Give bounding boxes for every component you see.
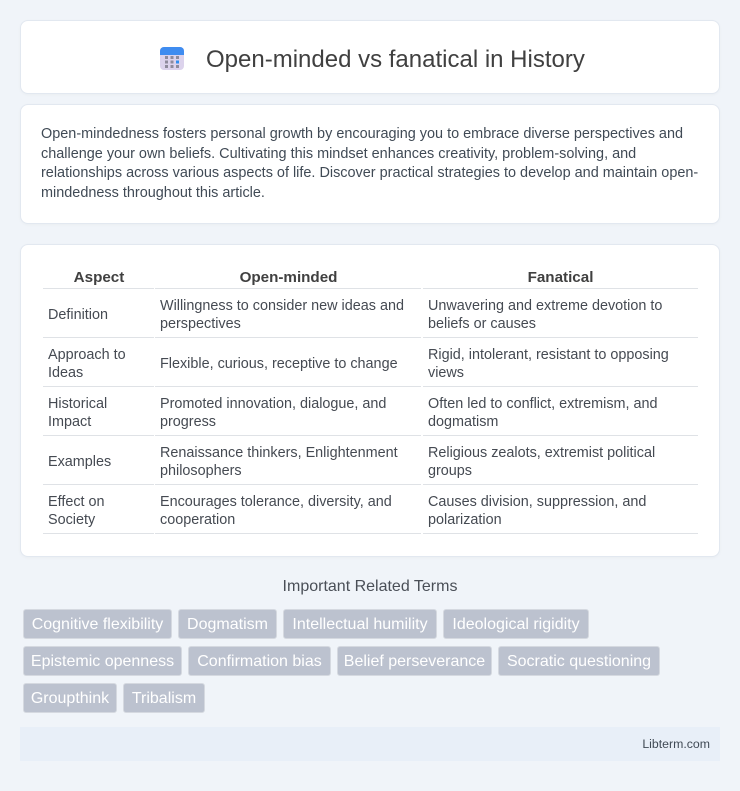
tag [23, 683, 117, 713]
tag [443, 609, 589, 639]
table: comparison: Encourages tolerance, diversity, and [160, 494, 392, 510]
panel: introduction [20, 104, 720, 224]
table: comparison: philosophers [160, 463, 242, 479]
row: Approach to Ideas: Approach to [48, 347, 126, 363]
table: comparison: progress [160, 414, 216, 430]
table: comparison: Often led to conflict, extremism, and [428, 396, 658, 412]
table: comparison: polarization [428, 512, 502, 528]
row: Approach to Ideas [48, 347, 126, 381]
heading: Fanatical: Fanatical [528, 269, 593, 286]
row: Effect on Society [48, 494, 105, 528]
table: comparison: dogmatism [428, 414, 498, 430]
title: Open-minded vs fanatical in History [206, 46, 585, 73]
tag: Epistemic openness [31, 653, 174, 670]
row: Historical Impact: Impact [48, 414, 91, 430]
related terms tags [23, 609, 660, 713]
table: comparison: Willingness to consider new ideas and [160, 298, 404, 314]
heading: Aspect: Aspect [74, 269, 124, 286]
row: Definition: Definition [48, 307, 108, 323]
footer bar [20, 727, 720, 761]
table: comparison: cooperation [160, 512, 235, 528]
panel: title header [20, 20, 720, 94]
text block: introduction: challenge your own beliefs. Cultivating this mindset enhances creativity, problem-solving, and [41, 146, 636, 162]
table: comparison: Promoted innovation, dialogue, and [160, 396, 386, 412]
tag: Groupthink [31, 690, 109, 707]
tag: Belief perseverance [344, 653, 485, 670]
table: comparison: beliefs or causes [428, 316, 536, 332]
tag [23, 646, 182, 676]
row: Effect on Society: Society [48, 512, 95, 528]
tag: Cognitive flexibility [32, 616, 163, 633]
table: comparison [43, 269, 698, 534]
row: Examples: Examples [48, 454, 111, 470]
table: comparison: views [428, 365, 464, 381]
tag [23, 609, 172, 639]
panel: comparison table [20, 244, 720, 557]
row: Approach to Ideas: Ideas [48, 365, 83, 381]
table: comparison: Causes division, suppression, and [428, 494, 646, 510]
table: comparison: Flexible, curious, receptive to change [160, 356, 398, 372]
row: Historical Impact [48, 396, 107, 430]
table: comparison: Religious zealots, extremist political [428, 445, 655, 461]
icon: calendar [160, 47, 184, 70]
text block: introduction [41, 126, 698, 201]
table: comparison: perspectives [160, 316, 241, 332]
tag: Socratic questioning [507, 653, 651, 670]
table: comparison: Rigid, intolerant, resistant to opposing [428, 347, 669, 363]
tag [123, 683, 205, 713]
tag: Intellectual humility [292, 616, 428, 633]
tag: Confirmation bias [197, 653, 322, 670]
text block: introduction: relationships across various aspects of life. Discover practical strategies to develop and maintain open- [41, 165, 698, 181]
tag: Tribalism [132, 690, 196, 707]
row: Effect on Society: Effect on [48, 494, 105, 510]
tag [188, 646, 331, 676]
tag [283, 609, 437, 639]
tag [498, 646, 660, 676]
table: comparison: groups [428, 463, 472, 479]
tag [337, 646, 492, 676]
table: comparison: Renaissance thinkers, Enlightenment [160, 445, 398, 461]
heading: Important Related Terms: Important Related Terms [283, 578, 457, 595]
tag: Dogmatism [187, 616, 268, 633]
footer credit: Libterm.com [642, 737, 710, 751]
text block: introduction: mindedness throughout this article. [41, 185, 265, 201]
tag: Ideological rigidity [452, 616, 580, 633]
text block: introduction: Open-mindedness fosters personal growth by encouraging you to embrace diverse perspectives and [41, 126, 683, 142]
row: Historical Impact: Historical [48, 396, 107, 412]
table: comparison: Unwavering and extreme devotion to [428, 298, 662, 314]
tag [178, 609, 277, 639]
heading: Open-minded: Open-minded [240, 269, 337, 286]
